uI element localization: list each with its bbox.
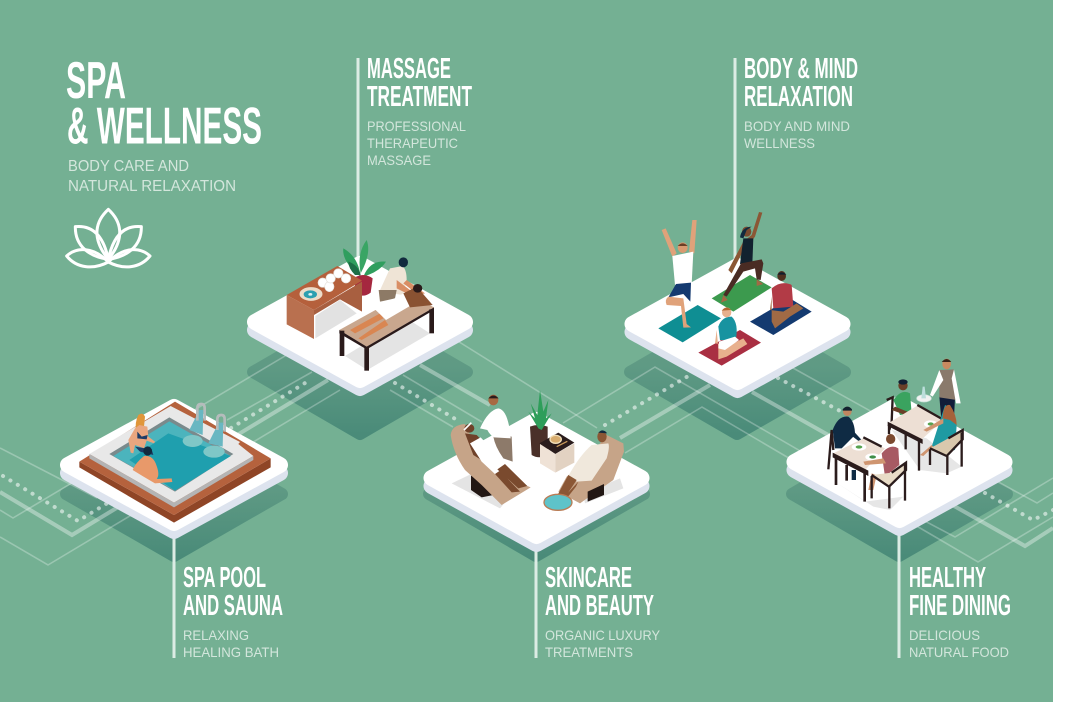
text: skincare: TREATMENTS <box>545 644 633 660</box>
text: dining <box>909 562 1011 660</box>
text: massage treatment: TREATMENT <box>367 81 472 113</box>
text: dining: DELICIOUS <box>909 627 980 643</box>
icon: lotus <box>67 209 150 267</box>
text: body and mind: WELLNESS <box>744 135 815 151</box>
text: skincare: SKINCARE <box>545 562 632 594</box>
text: skincare <box>545 562 661 660</box>
text: spa pool: RELAXING <box>183 627 249 643</box>
text: body and mind: RELAXATION <box>744 81 853 113</box>
text: body and mind: BODY & MIND <box>744 53 858 85</box>
text: massage treatment: MASSAGE <box>367 53 451 85</box>
page margin <box>1053 0 1080 702</box>
panel: spa pool platform <box>68 402 280 531</box>
text: dining: HEALTHY <box>909 562 986 594</box>
subtitle: BODY CARE AND <box>68 158 189 175</box>
title: & WELLNESS <box>67 98 262 156</box>
panel: dining platform <box>794 359 1004 528</box>
panel: yoga platform <box>632 212 842 390</box>
illustration: spa pool <box>79 402 271 523</box>
text: spa pool: SPA POOL <box>183 562 266 594</box>
illustration: dining tables <box>828 359 963 510</box>
title <box>66 52 262 156</box>
text: massage treatment: PROFESSIONAL <box>367 118 466 134</box>
illustration: yoga group <box>658 212 812 366</box>
subtitle: NATURAL RELAXATION <box>68 178 236 195</box>
text: spa pool: HEALING BATH <box>183 644 279 660</box>
text: massage treatment: THERAPEUTIC <box>367 135 458 151</box>
subtitle <box>68 158 236 195</box>
text: skincare: AND BEAUTY <box>545 590 654 622</box>
panel: skincare platform <box>432 390 642 544</box>
title: SPA <box>66 52 126 110</box>
illustration: beauty treatment chairs <box>451 390 624 510</box>
text: body and mind <box>744 53 858 151</box>
text: dining: FINE DINING <box>909 590 1011 622</box>
panel: massage platform <box>255 240 465 388</box>
text: body and mind: BODY AND MIND <box>744 118 850 134</box>
text: massage treatment: MASSAGE <box>367 152 431 168</box>
text: massage treatment <box>367 53 472 168</box>
text: dining: NATURAL FOOD <box>909 644 1009 660</box>
text: spa pool <box>183 562 283 660</box>
platform shadows <box>66 310 1007 556</box>
illustration: massage table and therapist <box>287 240 434 371</box>
text: skincare: ORGANIC LUXURY <box>545 627 661 643</box>
connector lines <box>174 58 899 658</box>
text: spa pool: AND SAUNA <box>183 590 283 622</box>
